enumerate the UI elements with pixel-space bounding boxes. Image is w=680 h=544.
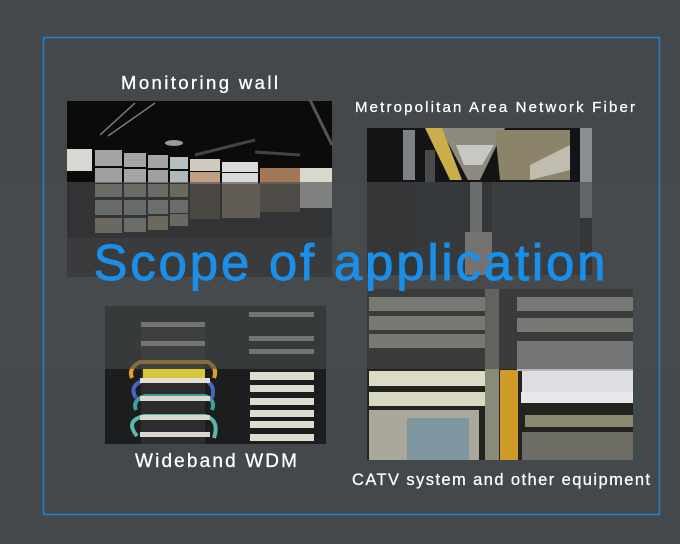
heading: CATV system: CATV system and other equipment	[352, 471, 650, 489]
title: Scope of application	[94, 234, 606, 291]
photo: monitoring wall	[67, 100, 332, 277]
photo: wideband WDM	[105, 306, 326, 444]
heading: wideband WDM: Wideband WDM	[135, 451, 297, 472]
frame border	[44, 38, 660, 514]
photo: metropolitan area network fiber	[367, 128, 592, 275]
translucent band	[0, 182, 680, 369]
heading: metropolitan area network fiber: Metropolitan Area Network Fiber	[355, 99, 635, 116]
heading: monitoring wall: Monitoring wall	[121, 72, 278, 93]
photo: CATV system	[367, 289, 633, 460]
